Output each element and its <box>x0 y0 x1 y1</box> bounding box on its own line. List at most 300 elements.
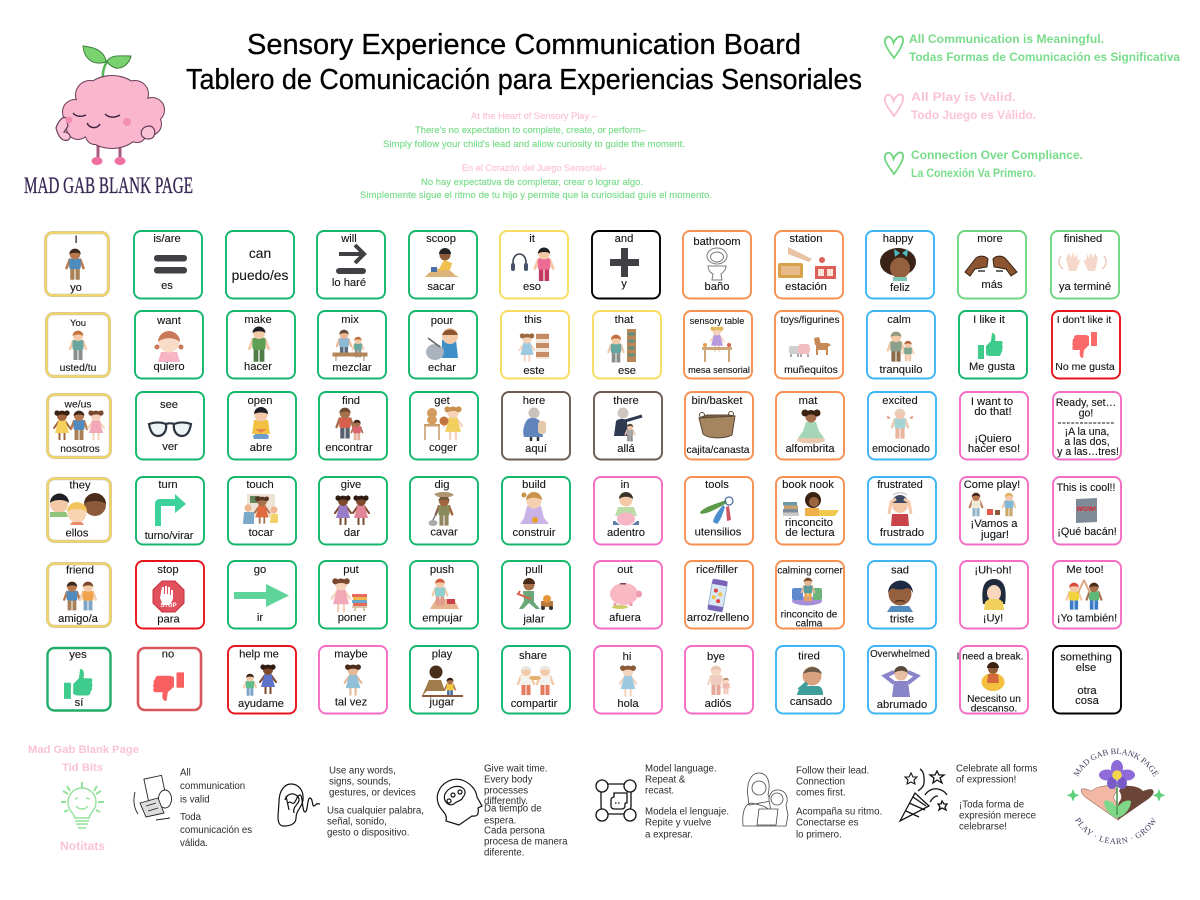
tip: give wait time: Give wait time. <box>484 764 548 774</box>
card: rice/filler: rice/filler <box>696 564 738 576</box>
card: it: it <box>529 233 536 245</box>
card: we/us <box>48 395 110 457</box>
card: Uh-oh: ¡Uh-oh! <box>974 564 1012 576</box>
card: I need a break: Necesito un <box>967 694 1021 705</box>
card: finished: ya terminé <box>1059 281 1111 293</box>
card: is/are: es <box>161 280 173 292</box>
card: dig: cavar <box>430 526 458 538</box>
card: get <box>410 392 478 460</box>
card: hi: hola <box>617 698 639 710</box>
card: sensory table: mesa sensorial <box>688 365 750 375</box>
card: make: hacer <box>244 361 272 373</box>
intro text block: No hay expectativa de completar, crear o lograr algo. <box>421 177 643 188</box>
card: pour <box>409 311 477 378</box>
motto: communication <box>885 32 1180 64</box>
card: something else: cosa <box>1075 695 1100 707</box>
card: happy: feliz <box>890 282 910 294</box>
card: I like it: I like it <box>973 314 1006 326</box>
card: go: ir <box>257 612 263 624</box>
card: want: quiero <box>153 361 185 373</box>
card: here: aquí <box>525 443 548 455</box>
tip: model language: Repeat & <box>645 774 686 786</box>
card: You <box>47 314 109 376</box>
intro text block: At the Heart of Sensory Play – <box>471 111 598 122</box>
card: I need a break <box>957 646 1028 714</box>
tip: model language: a expresar. <box>645 830 693 840</box>
card: want <box>135 311 203 378</box>
tip: give wait time: espera. <box>484 816 516 826</box>
card: open: open <box>248 395 272 407</box>
card: Ready, set, go: y a las…tres! <box>1057 446 1119 458</box>
card: stop: stop <box>157 564 179 576</box>
icon: heart hands and flower <box>1067 760 1165 820</box>
card: Come play: ¡Vamos a <box>970 518 1018 530</box>
tip: use any words: señal, sonido, <box>327 816 387 828</box>
icon: sprout <box>83 46 131 80</box>
card: see <box>136 392 204 460</box>
card: turn: turn <box>158 479 178 491</box>
card: mix: mix <box>341 314 359 326</box>
card: out: afuera <box>609 612 642 624</box>
card: book nook <box>776 477 844 544</box>
card: help me <box>228 646 296 714</box>
card: This is cool: This is cool!! <box>1057 482 1115 494</box>
card: Overwhelmed: Overwhelmed <box>870 649 930 660</box>
intro text block: There's no expectation to complete, create, or perform– <box>415 125 647 136</box>
tip: use any words: signs, sounds, <box>329 776 391 788</box>
card: share <box>502 646 570 714</box>
icon: head with brain <box>437 779 482 825</box>
motto: connection <box>885 148 1083 180</box>
card: pull <box>502 561 570 628</box>
card: dig <box>410 477 478 544</box>
card: play: play <box>432 648 453 660</box>
card: there <box>594 392 662 460</box>
card: find: encontrar <box>325 442 373 454</box>
card: happy: happy <box>883 233 914 245</box>
card: bin/basket <box>685 392 753 460</box>
tid bits heading with bulb: Mad Gab Blank Page <box>28 744 139 756</box>
card: toys/figurines <box>775 311 843 378</box>
card: You: usted/tu <box>60 363 97 374</box>
card: I need a break: I need a break. <box>957 652 1023 662</box>
card: they <box>48 479 110 541</box>
card: I like it: Me gusta <box>969 361 1016 373</box>
tip: give wait time: procesa de manera <box>484 836 568 848</box>
motto: play: Todo Juego es Válido. <box>911 108 1036 122</box>
card: can: puedo/es <box>232 268 288 283</box>
tip: give wait time: differently. <box>484 796 528 807</box>
card: I / yo <box>46 233 108 295</box>
tip: celebrate <box>900 764 1037 832</box>
card: bathroom <box>683 231 751 298</box>
card: play <box>410 646 478 714</box>
card: bye: adiós <box>705 698 732 710</box>
card: go: go <box>254 564 266 576</box>
card: Overwhelmed <box>868 646 936 714</box>
card: You: You <box>70 318 86 329</box>
card: stop <box>136 561 204 628</box>
card: share: share <box>519 650 547 662</box>
card: there: allá <box>617 443 635 455</box>
card: more <box>958 231 1026 298</box>
card: excited: excited <box>882 395 918 407</box>
card: Come play: jugar! <box>980 529 1009 541</box>
card: Come play <box>960 477 1028 544</box>
card: more: more <box>977 233 1003 245</box>
card: maybe: tal vez <box>335 696 368 708</box>
card: This is cool <box>1053 477 1121 544</box>
tip: all communication is valid: All <box>180 768 191 778</box>
tip: follow their lead: Connection <box>796 776 845 788</box>
card: pull: jalar <box>522 614 545 626</box>
card: calming corner <box>776 561 844 630</box>
card: Uh-oh <box>960 561 1028 628</box>
card: I want to do that <box>960 392 1028 460</box>
tip: give wait time: Cada persona <box>484 826 545 836</box>
tip: celebrate: celebrarse! <box>959 822 1007 832</box>
card: Overwhelmed: abrumado <box>877 699 927 711</box>
card: push: push <box>430 564 454 576</box>
card: excited <box>868 392 936 460</box>
card: This is cool: ¡Qué bacán! <box>1057 526 1117 538</box>
card: book nook: de lectura <box>785 527 835 539</box>
card: I want to do that: ¡Quiero <box>974 433 1012 445</box>
tip: all communication is valid: Toda <box>180 812 202 823</box>
card: it: eso <box>523 281 541 293</box>
card: put: put <box>343 564 360 576</box>
card: toys/figurines: toys/figurines <box>781 315 839 326</box>
card: no <box>138 648 201 710</box>
card: will: lo haré <box>332 277 366 289</box>
card: out <box>594 561 662 628</box>
tip: use any words: gesto o dispositivo. <box>327 828 409 838</box>
card: I / yo: I <box>74 234 78 246</box>
card: tired <box>776 646 844 714</box>
card: in <box>594 477 662 544</box>
card: yes: yes <box>69 649 87 661</box>
card: bye: bye <box>707 651 725 663</box>
card: find <box>319 392 387 460</box>
motto: play <box>885 90 1036 122</box>
logo: Mad Gab Blank Page brain mascot <box>24 46 193 198</box>
card: open: abre <box>250 442 272 454</box>
card: mix <box>318 311 386 378</box>
card: mat <box>776 392 844 460</box>
card: Ready, set, go: go! <box>1079 408 1093 420</box>
card: pull: pull <box>525 564 543 576</box>
card: turn <box>136 477 204 544</box>
card: Ready, set, go: a las dos, <box>1064 436 1110 448</box>
card: something else <box>1053 646 1121 714</box>
badge ring text: PLAY · LEARN · GROW <box>1075 817 1156 844</box>
card: Ready, set, go: ¡A la una, <box>1065 426 1109 438</box>
card: see: ver <box>162 441 178 453</box>
tip: follow their lead: Acompaña su ritmo. <box>796 806 882 818</box>
card: hi <box>594 646 662 714</box>
tid bits heading with bulb: Notitats <box>60 841 105 853</box>
card: build <box>502 477 570 544</box>
card: we/us: we/us <box>64 400 91 410</box>
card: stop: para <box>157 614 180 626</box>
card: happy <box>866 231 934 298</box>
card: something else: something <box>1060 652 1112 664</box>
card: bye <box>685 646 753 714</box>
card: frustrated: frustrated <box>877 479 923 491</box>
tip: use any words <box>278 766 424 838</box>
motto: connection: La Conexión Va Primero. <box>911 166 1036 180</box>
tip: give wait time: Da tiempo de <box>484 804 542 814</box>
card: want: want <box>156 315 182 327</box>
card: tired: tired <box>798 650 820 662</box>
tip: give wait time: diferente. <box>484 848 524 858</box>
tip: all communication is valid: válida. <box>180 838 208 849</box>
tip: all communication is valid: communication <box>180 781 245 792</box>
card: it <box>500 231 568 298</box>
card: I want to do that: hacer eso! <box>968 443 1020 455</box>
card: something else: otra <box>1077 685 1097 697</box>
tip: model language: Repite y vuelve <box>645 818 711 828</box>
card: touch <box>228 477 296 544</box>
intro text block <box>360 111 712 201</box>
tip: model language <box>596 764 729 840</box>
card: tools: tools <box>705 479 729 491</box>
card: see: see <box>160 399 178 411</box>
card: excited: emocionado <box>872 443 930 455</box>
card: frustrated: frustrado <box>880 527 924 539</box>
card: out: out <box>617 564 634 576</box>
card: in: adentro <box>607 527 645 539</box>
card: tired: cansado <box>790 696 832 708</box>
badge ring text: MAD GAB BLANK PAGE <box>1073 748 1158 777</box>
tip: model language: Model language. <box>645 764 717 774</box>
tid bits heading with bulb: Tid Bits <box>62 762 103 774</box>
icon: parent and child with tablet <box>743 773 788 826</box>
card: is/are: is/are <box>153 233 181 245</box>
intro text block: En el Corazón del Juego Sensorial– <box>462 163 608 174</box>
card: frustrated <box>868 477 936 544</box>
card: here <box>502 392 570 460</box>
card: something else: else <box>1076 662 1096 674</box>
card: more: más <box>981 279 1003 291</box>
card: friend <box>48 564 110 626</box>
card: I want to do that: do that! <box>974 406 1012 418</box>
card: sad: sad <box>891 564 909 576</box>
tip: use any words: gestures, or devices <box>329 788 416 798</box>
card: Me too: Me too! <box>1066 564 1104 576</box>
card: there: there <box>613 395 639 407</box>
card: can <box>226 231 294 298</box>
card: bin/basket: bin/basket <box>692 395 743 407</box>
tip: model language: Modela el lenguaje. <box>645 806 729 818</box>
tip: use any words: Usa cualquier palabra, <box>327 806 424 816</box>
icon: smiling lightbulb <box>61 782 104 828</box>
tip: give wait time: Every body <box>484 774 533 786</box>
card: find: find <box>342 395 360 407</box>
tip: give wait time <box>437 764 568 858</box>
card: friend: friend <box>66 564 94 576</box>
tip: give wait time: processes <box>484 786 528 796</box>
tip: all communication is valid: is valid <box>180 794 210 806</box>
card: calm: calm <box>887 314 911 326</box>
tip: follow their lead <box>743 766 882 840</box>
card: maybe: maybe <box>334 648 368 660</box>
icon: ear with sound wave <box>278 784 320 826</box>
card: here: here <box>523 395 545 407</box>
card: mix: mezclar <box>332 362 372 374</box>
card: book nook: rinconcito <box>785 517 833 529</box>
motto: communication: Todas Formas de Comunicación es Significativa <box>909 50 1180 64</box>
motto: communication: All Communication is Meaningful. <box>909 32 1104 46</box>
card: put: poner <box>338 612 367 624</box>
tip: follow their lead: Follow their lead. <box>796 766 869 776</box>
logo: Mad Gab Blank Page round badge <box>1066 748 1166 844</box>
card: will: will <box>340 233 357 245</box>
card: bathroom: baño <box>705 281 729 293</box>
card: scoop <box>409 231 477 298</box>
card: is/are <box>134 231 202 298</box>
tip: follow their lead: lo primero. <box>796 830 842 840</box>
card: scoop: sacar <box>427 281 455 293</box>
card: touch: touch <box>246 479 274 491</box>
title <box>186 29 862 96</box>
card: that <box>593 311 661 378</box>
card: sad <box>868 561 936 628</box>
card: Me too: ¡Yo también! <box>1057 612 1117 624</box>
card: This is cool: WOW! <box>1077 506 1096 513</box>
card: yes: sí <box>75 697 84 709</box>
title: Sensory Experience Communication Board <box>247 29 801 61</box>
card: get: get <box>434 395 451 407</box>
card: turn: turno/virar <box>145 530 194 542</box>
tip: celebrate: ¡Toda forma de <box>959 800 1024 810</box>
card: that: that <box>615 314 634 326</box>
logo wordmark: MAD GAB BLANK PAGE <box>24 173 193 198</box>
tip: use any words: Use any words, <box>329 766 396 776</box>
card: rice/filler: arroz/relleno <box>687 612 749 624</box>
card: pour: echar <box>428 362 456 374</box>
card: can: can <box>249 246 271 261</box>
card: give: give <box>341 479 361 491</box>
card: toys/figurines: muñequitos <box>784 365 838 376</box>
icon: communication cards and device <box>134 775 172 820</box>
communication board grid <box>46 231 1121 714</box>
card: tools <box>685 477 753 544</box>
card: in: in <box>621 479 629 491</box>
card: Me too <box>1053 561 1121 628</box>
card: I don't like it <box>1052 311 1120 378</box>
card: we/us: nosotros <box>60 444 100 455</box>
card: push: empujar <box>422 612 463 624</box>
card: I like it <box>959 311 1027 378</box>
title: Tablero de Comunicación para Experiencias Sensoriales <box>186 64 862 96</box>
card: sensory table: sensory table <box>690 316 744 326</box>
card: hi: hi <box>623 651 631 663</box>
card: mat: alfombrita <box>785 443 835 455</box>
card: finished <box>1051 231 1119 298</box>
mottos with hearts <box>885 32 1180 180</box>
icon: network of people with speech bubbles <box>596 780 636 821</box>
card: sad: triste <box>890 614 914 626</box>
badge ring text <box>1073 748 1158 844</box>
card: touch: tocar <box>249 527 274 539</box>
card: dig: dig <box>435 479 449 491</box>
card: build: build <box>522 479 546 491</box>
card: this: this <box>524 314 542 326</box>
tip: celebrate: expresión merece <box>959 810 1036 822</box>
card: build: construir <box>513 527 556 539</box>
tip: celebrate: Celebrate all forms <box>956 764 1037 774</box>
card: and: and <box>615 233 633 245</box>
card: they: they <box>69 480 91 492</box>
card: that: ese <box>618 365 636 377</box>
card: mat: mat <box>799 395 818 407</box>
icon: brain mascot <box>56 76 164 165</box>
intro text block: Simply follow your child's lead and allow curiosity to guide the moment. <box>383 139 685 150</box>
card: give <box>319 477 387 544</box>
card: Uh-oh: ¡Uy! <box>983 612 1003 624</box>
card: put <box>319 561 387 628</box>
card: tools: utensilios <box>695 526 742 538</box>
tip: model language: recast. <box>645 786 674 796</box>
tip: follow their lead: Conectarse es <box>796 818 859 828</box>
card: share: compartir <box>511 698 558 710</box>
card: calm <box>867 311 935 378</box>
card: book nook: book nook <box>782 479 834 491</box>
card: push <box>410 561 478 628</box>
card: calm: tranquilo <box>880 364 922 376</box>
card: get: coger <box>429 442 457 454</box>
card: I don't like it: I don't like it <box>1057 315 1111 326</box>
card: friend: amigo/a <box>58 613 99 625</box>
card: scoop: scoop <box>426 233 456 245</box>
card: help me: ayudame <box>238 698 284 710</box>
intro text block: Simplemente sigue el ritmo de tu hijo y permite que la curiosidad guíe el momento. <box>360 190 712 201</box>
card: stop: STOP <box>160 603 177 609</box>
card: pour: pour <box>431 315 453 327</box>
card: open <box>228 392 296 460</box>
icon: party popper and stars <box>900 769 947 821</box>
card: make: make <box>244 314 272 326</box>
card: and <box>592 231 660 298</box>
card: and: y <box>621 278 627 290</box>
card: give: dar <box>344 527 360 539</box>
card: station: station <box>790 233 822 245</box>
card: go <box>228 561 296 628</box>
card: play: jugar <box>429 696 455 708</box>
card: they: ellos <box>65 528 89 540</box>
card: make <box>227 311 295 378</box>
card: I / yo: yo <box>70 282 82 294</box>
tid bits heading with bulb <box>28 744 139 853</box>
card: help me: help me <box>239 648 279 660</box>
card: maybe <box>319 646 387 714</box>
tip: celebrate: of expression! <box>956 774 1016 786</box>
card: calming corner: calming corner <box>777 566 843 576</box>
card: Come play: Come play! <box>964 479 1020 491</box>
card: bin/basket: cajita/canasta <box>687 445 750 456</box>
tip: follow their lead: comes first. <box>796 788 846 798</box>
card: calming corner: calma <box>796 618 823 630</box>
motto: play: All Play is Valid. <box>911 90 1016 104</box>
tip: all communication is valid: comunicación es <box>180 825 252 836</box>
card: bathroom: bathroom <box>693 236 741 248</box>
card: station <box>775 231 843 298</box>
card: this <box>501 311 569 378</box>
card: Ready, set, go <box>1053 392 1121 460</box>
card: I want to do that: I want to <box>971 396 1013 408</box>
card: no: no <box>162 648 174 660</box>
